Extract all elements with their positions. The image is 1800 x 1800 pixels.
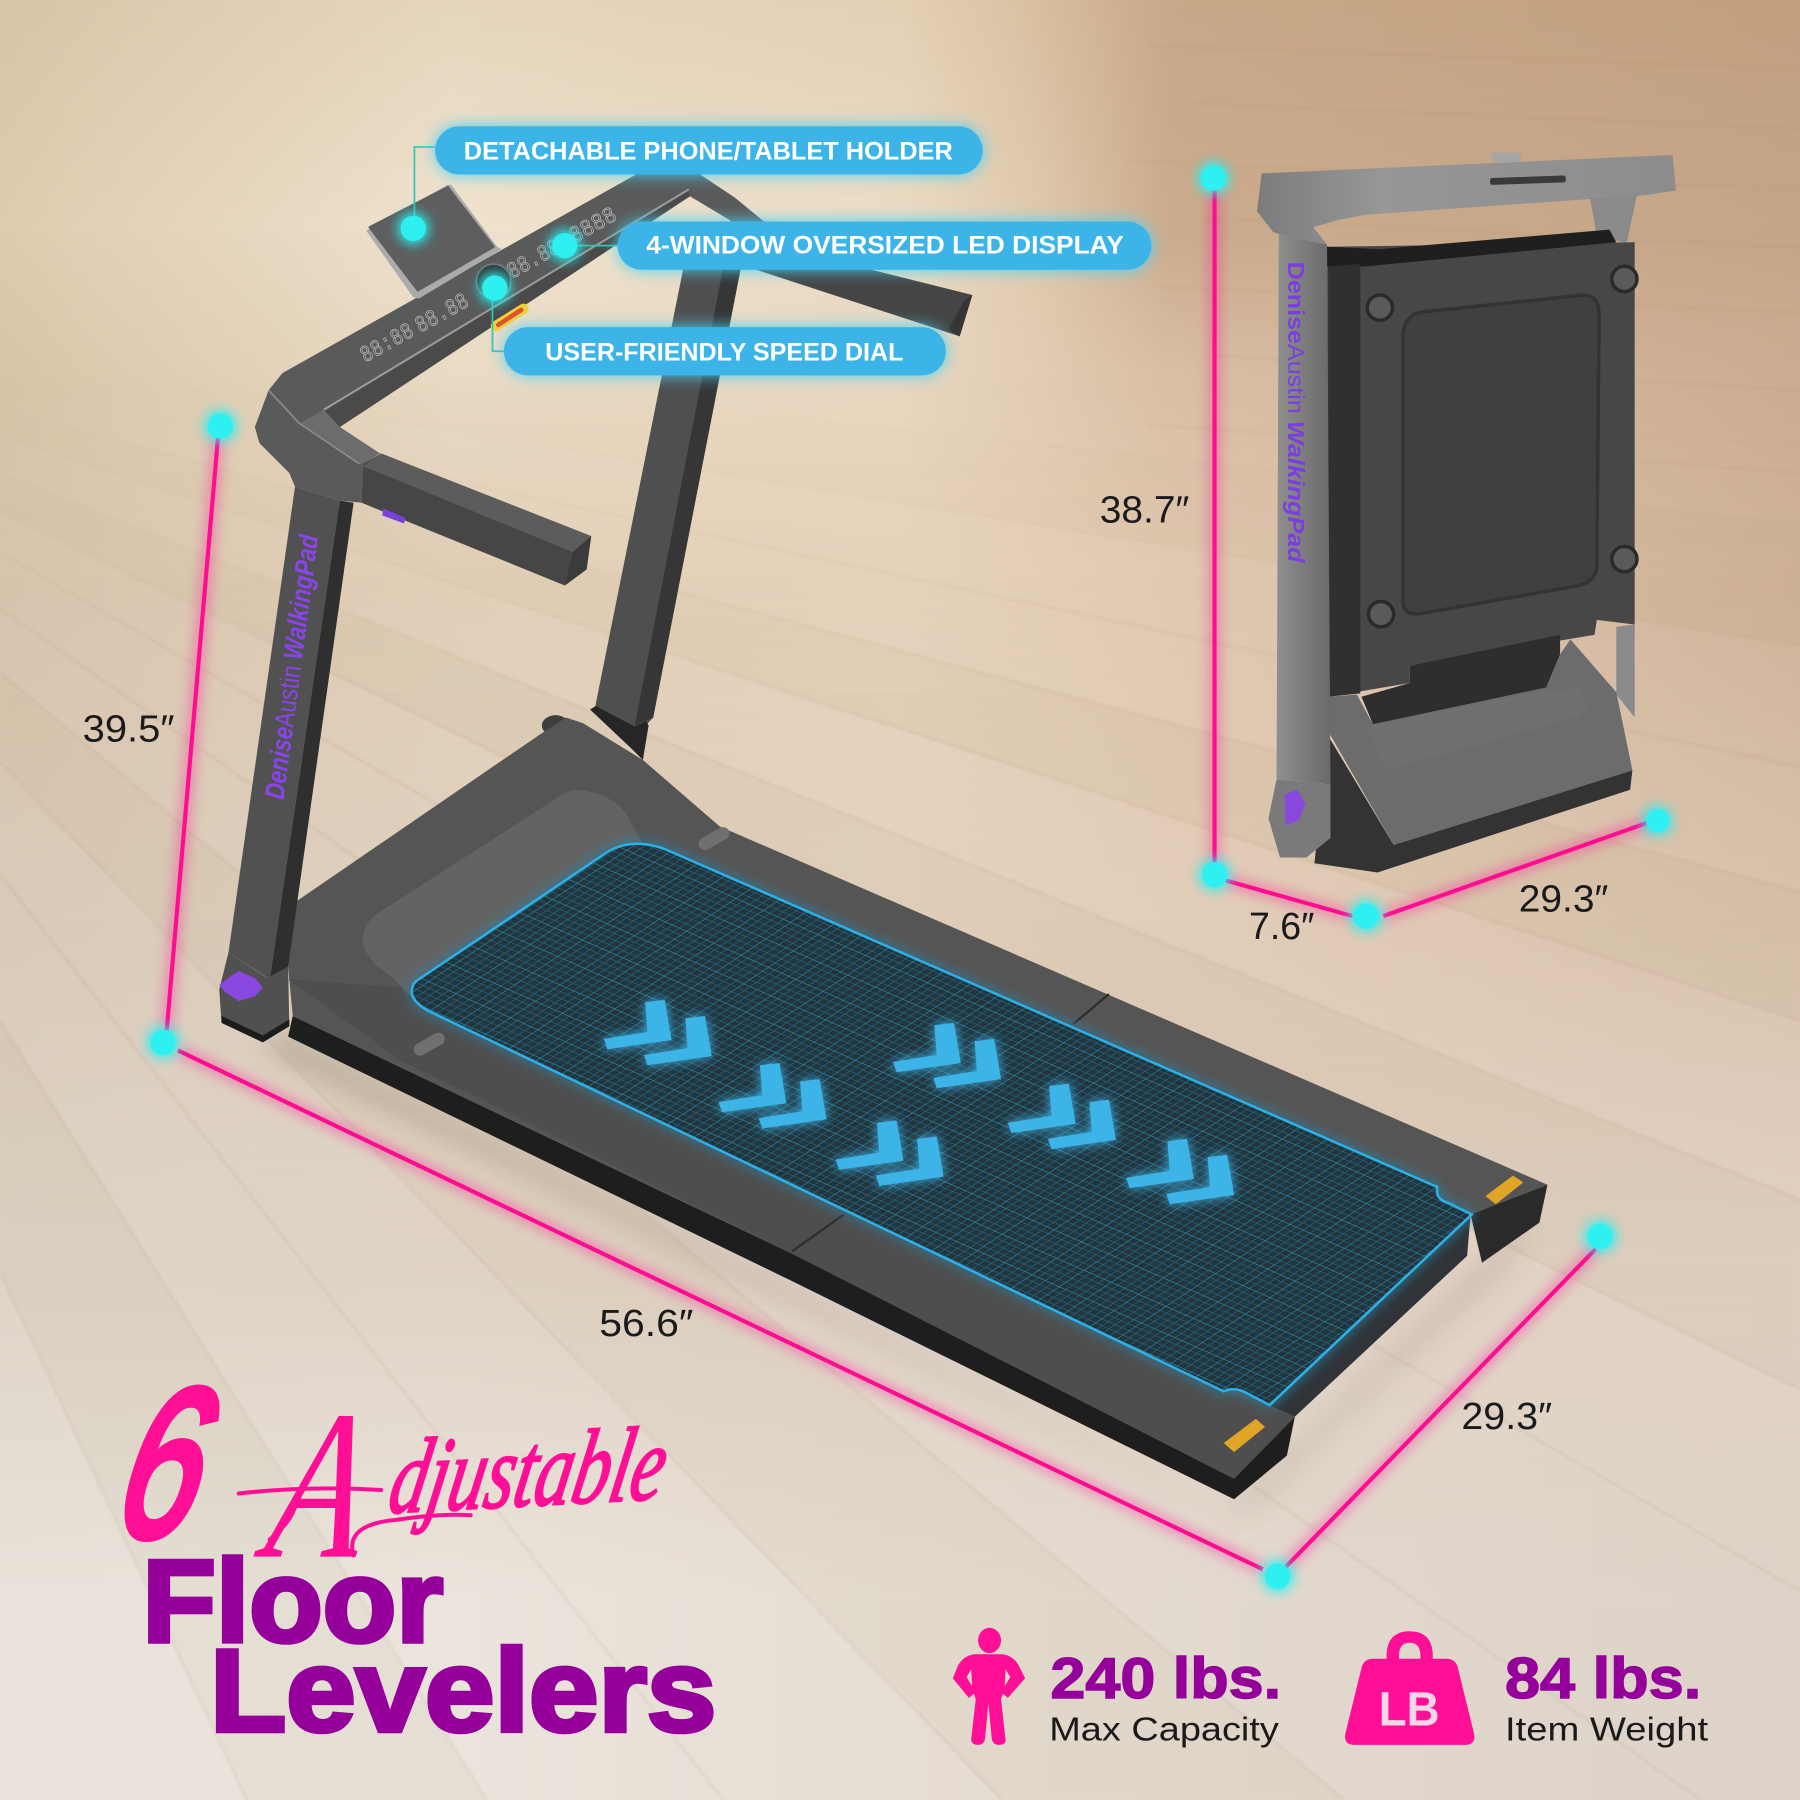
indicator strip bbox=[496, 309, 523, 326]
foot bracket bbox=[219, 953, 289, 1042]
near rail crease bbox=[288, 979, 1295, 1479]
left handlebar bbox=[362, 453, 591, 585]
callout: LED display bbox=[618, 222, 1151, 270]
main treadmill bbox=[219, 174, 1547, 1515]
title: Floor Levelers: Levelers bbox=[210, 1625, 716, 1756]
dimension endpoints bbox=[150, 165, 1669, 1589]
foot bracket bbox=[1268, 779, 1330, 858]
speed dial bbox=[476, 264, 511, 298]
icon: person bbox=[953, 1628, 1025, 1745]
floor plank grain bbox=[0, 616, 1800, 1800]
dimension labels: 39.5″ bbox=[83, 709, 174, 751]
left upright bbox=[228, 487, 354, 979]
title: Floor Levelers bbox=[142, 1536, 716, 1756]
bar slot bbox=[1490, 175, 1566, 185]
dimension labels bbox=[83, 489, 1608, 1438]
callout: LED display: 4-WINDOW OVERSIZED LED DISPLAY bbox=[646, 232, 1124, 260]
icon: weight bbox=[1345, 1631, 1474, 1745]
title: script line bbox=[92, 1345, 677, 1603]
warning labels bbox=[1224, 1176, 1523, 1452]
right post bbox=[1590, 195, 1637, 243]
rubber bumpers bbox=[420, 833, 723, 1049]
LED digits: 88.88 bbox=[503, 235, 566, 285]
deck top bbox=[288, 717, 1547, 1479]
deck side bbox=[288, 1016, 1295, 1499]
console frame bbox=[255, 174, 804, 503]
LED digits: 88.88 bbox=[411, 288, 474, 339]
dimension labels: 29.3″ bbox=[1519, 878, 1608, 920]
left darker strip bbox=[1328, 264, 1360, 697]
stat: max capacity bbox=[1049, 1647, 1281, 1748]
top bar bbox=[1257, 155, 1676, 245]
upright brand text: DeniseAustin WalkingPad bbox=[259, 532, 324, 801]
phone holder bbox=[366, 185, 502, 298]
purple knob bbox=[1285, 790, 1305, 825]
callout: speed dial: USER-FRIENDLY SPEED DIAL bbox=[545, 338, 903, 366]
stat: item weight: 84 lbs. bbox=[1505, 1647, 1701, 1711]
lower right post bbox=[1616, 624, 1635, 717]
deck top edge bbox=[1327, 230, 1616, 266]
right handlebar bbox=[757, 247, 972, 336]
bracket base bbox=[222, 1016, 289, 1042]
callout: phone holder bbox=[435, 126, 983, 174]
belt bbox=[412, 844, 1472, 1405]
purple knob bbox=[219, 971, 263, 1001]
stat: item weight bbox=[1505, 1647, 1708, 1748]
bar dial bbox=[1491, 153, 1521, 162]
console knob behind hood bbox=[542, 715, 569, 736]
feature markers bbox=[401, 216, 577, 301]
folded deck bbox=[1327, 242, 1635, 697]
far floor streaks bbox=[1125, 46, 1800, 473]
chevron arrows on belt bbox=[604, 1000, 1234, 1204]
handle recess bbox=[1366, 689, 1586, 770]
handle housing bbox=[1328, 639, 1632, 845]
title: script line: A bbox=[245, 1367, 390, 1603]
motor hood panel bbox=[363, 790, 649, 1010]
right upright bbox=[595, 264, 740, 735]
callout: phone holder: DETACHABLE PHONE/TABLET HOLDER bbox=[464, 138, 953, 166]
callout: speed dial bbox=[504, 327, 946, 375]
deck underside panel bbox=[1403, 295, 1599, 614]
indicator strip core bbox=[498, 310, 521, 325]
dimension labels: 7.6″ bbox=[1249, 906, 1314, 948]
deck shadow bbox=[270, 1033, 1538, 1515]
roller end bbox=[1268, 1215, 1471, 1417]
rail seams bbox=[792, 994, 1109, 1251]
lower recess bbox=[1361, 635, 1560, 724]
leader lines bbox=[414, 147, 620, 351]
LED digits bbox=[356, 202, 622, 369]
dimension labels: 29.3″ bbox=[1461, 1396, 1552, 1438]
stat: max capacity: 240 lbs. bbox=[1050, 1647, 1281, 1711]
brand text: Denise Austin WalkingPad bbox=[1283, 262, 1309, 564]
icon: weight: LB bbox=[1379, 1682, 1440, 1736]
rear cap side bbox=[1471, 1185, 1547, 1263]
left post bbox=[1277, 234, 1330, 784]
title: script line: 6 bbox=[92, 1345, 249, 1581]
LED digits: 8888 bbox=[565, 202, 622, 249]
dimension lines bbox=[166, 189, 1653, 1569]
upright base collar bbox=[590, 706, 649, 760]
stat: max capacity: Max Capacity bbox=[1049, 1711, 1279, 1748]
dimension labels: 38.7″ bbox=[1100, 489, 1189, 531]
dimension labels: 56.6″ bbox=[599, 1303, 693, 1345]
title: Floor Levelers: Floor bbox=[142, 1536, 443, 1667]
stat: item weight: Item Weight bbox=[1505, 1711, 1708, 1748]
LED digits: 88:88 bbox=[356, 318, 419, 369]
base bbox=[1314, 736, 1632, 872]
feet knobs bbox=[1367, 266, 1637, 627]
folded treadmill bbox=[1257, 153, 1676, 872]
title: script line: djustable bbox=[381, 1404, 677, 1536]
